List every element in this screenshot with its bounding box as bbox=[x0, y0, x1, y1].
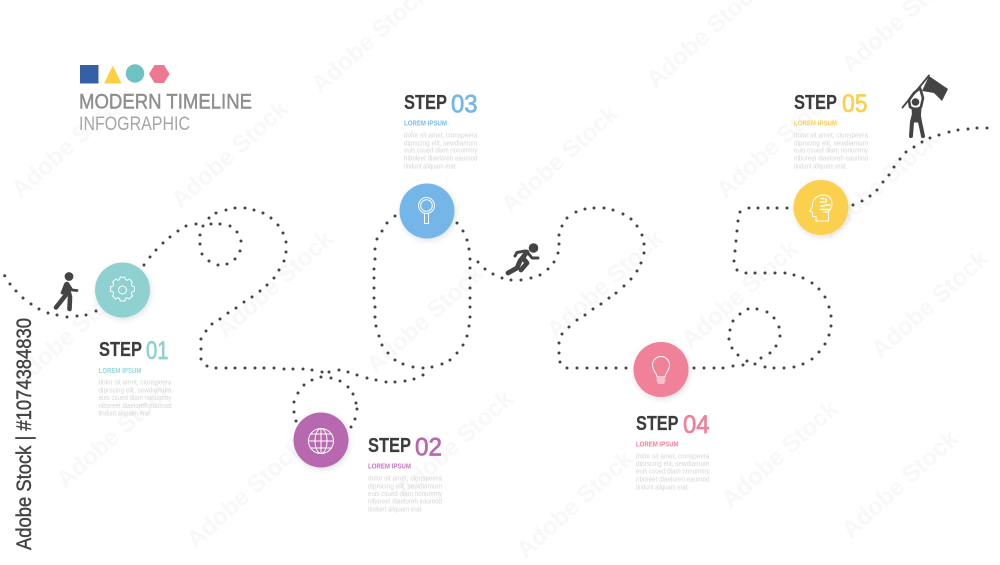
step 1 text: 01 bbox=[146, 337, 168, 365]
step 3 text: tindunt aliquam erat. bbox=[404, 164, 457, 170]
step 2 text: niboreet diaeloreh eaumod bbox=[368, 498, 442, 506]
watermark pattern: Adobe Stock bbox=[511, 445, 639, 564]
step 4 text: 04 bbox=[683, 411, 710, 439]
step 3 text: 03 bbox=[451, 90, 478, 118]
step 5 text: dolor sit amet, cionspeera bbox=[794, 132, 868, 140]
watermark pattern: Adobe Stock bbox=[816, 125, 944, 244]
step 1 text: niboreet diaeloreh eaumod bbox=[98, 403, 172, 410]
dotted timeline path bbox=[5, 128, 987, 427]
step 4 text: dolor sit amet, cionspeera bbox=[636, 454, 710, 460]
watermark pattern: Adobe Stock bbox=[6, 85, 134, 204]
step 4 text: euis csued diam nonummy bbox=[636, 468, 710, 476]
watermark pattern: Adobe Stock bbox=[181, 435, 309, 554]
icon: light bulb bbox=[652, 356, 670, 383]
watermark pattern: Adobe Stock bbox=[711, 85, 839, 204]
step 2 text: LOREM IPSUM bbox=[368, 462, 411, 470]
step 4 text: diprscing elit, sewdiamum bbox=[636, 461, 710, 468]
step 5 node bbox=[794, 180, 848, 235]
watermark pattern: Adobe Stock bbox=[836, 425, 964, 544]
watermark pattern: Adobe Stock bbox=[866, 245, 994, 364]
step 5 text: STEP bbox=[794, 92, 837, 114]
watermark pattern: Adobe Stock bbox=[391, 385, 519, 504]
logo shapes bbox=[80, 64, 170, 84]
step 3 text: hiboleet diaeloreh eaumod bbox=[404, 156, 478, 162]
watermark pattern: Adobe Stock bbox=[716, 395, 844, 514]
step 5 text: euis csued diam nonummy bbox=[794, 148, 868, 154]
watermark pattern: Adobe Stock bbox=[361, 260, 489, 379]
step 1 text: euis csued diam nonummy bbox=[98, 395, 172, 402]
step 2 text bbox=[368, 434, 442, 514]
watermark pattern: Adobe Stock bbox=[51, 375, 179, 494]
step 3 node bbox=[400, 184, 454, 238]
step 4 text: tindunt aliquam erat. bbox=[636, 484, 689, 492]
step 4 node bbox=[634, 342, 688, 397]
step 3 text: euis csued diam nonummy bbox=[404, 148, 478, 154]
step 2 text: 02 bbox=[415, 434, 442, 462]
step 3 text bbox=[404, 90, 478, 170]
step 1 text bbox=[98, 337, 172, 418]
step 3 text: diprscing elit, sewdiamum bbox=[404, 140, 478, 148]
step 5 text: LOREM IPSUM bbox=[794, 118, 837, 128]
figure: running person bbox=[508, 243, 538, 273]
step 3 text: STEP bbox=[404, 92, 447, 114]
title: INFOGRAPHIC bbox=[79, 113, 190, 135]
step 1 text: tindunt aliquam erat. bbox=[98, 410, 152, 418]
icon: head with brain bbox=[810, 195, 832, 221]
title bbox=[79, 90, 252, 135]
step 4 text: STEP bbox=[636, 413, 678, 435]
step 2 text: dolor sit amet, cionspeera bbox=[368, 476, 442, 482]
watermark pattern: Adobe Stock bbox=[541, 225, 669, 344]
step 2 node bbox=[294, 412, 348, 468]
step 1 text: dolor sit amet, cionspeera bbox=[98, 380, 172, 386]
step 1 text: STEP bbox=[99, 339, 142, 361]
figure: walking person bbox=[56, 272, 77, 309]
step 1 text: diprscing elit, sewdiamum bbox=[98, 388, 172, 394]
watermark pattern: Adobe Stock bbox=[496, 100, 624, 219]
step 3 text: LOREM IPSUM bbox=[404, 118, 447, 128]
step 5 text: niboreet diaeloreh eaumod bbox=[794, 156, 868, 162]
side credit text: Adobe Stock | #1074384830 bbox=[13, 318, 36, 550]
figure: person holding flag bbox=[902, 76, 948, 136]
title: MODERN TIMELINE bbox=[79, 90, 252, 114]
watermark pattern: Adobe Stock bbox=[676, 235, 804, 354]
step 4 text: LOREM IPSUM bbox=[636, 440, 678, 448]
step 2 text: STEP bbox=[368, 435, 411, 457]
watermark pattern: Adobe Stock bbox=[6, 275, 134, 394]
step 5 text: diprscing elit, sewdiamum bbox=[794, 140, 868, 148]
watermark pattern: Adobe Stock bbox=[166, 95, 294, 214]
step 5 text bbox=[794, 90, 868, 170]
step 2 text: diprscing elit, sewdiamum bbox=[368, 484, 442, 490]
step 2 text: euis csued diam nonummy bbox=[368, 491, 442, 498]
step 3 text: dolor sit amet, cionspeera bbox=[404, 132, 478, 140]
step 2 text: tindunt aliquam erat. bbox=[368, 506, 423, 514]
step 1 text: LOREM IPSUM bbox=[98, 366, 142, 375]
step 4 text: nboreet diaeloren eaumod bbox=[636, 476, 710, 484]
step 5 text: 05 bbox=[842, 90, 868, 118]
step 4 text bbox=[636, 411, 710, 492]
step 5 text: tindunt aliquam erat. bbox=[794, 164, 847, 170]
watermark pattern: Adobe Stock bbox=[211, 225, 339, 344]
step 1 node bbox=[95, 262, 150, 318]
icon: magnifier bbox=[418, 198, 434, 224]
icon: gear bbox=[111, 277, 134, 301]
icon: globe bbox=[308, 428, 334, 454]
